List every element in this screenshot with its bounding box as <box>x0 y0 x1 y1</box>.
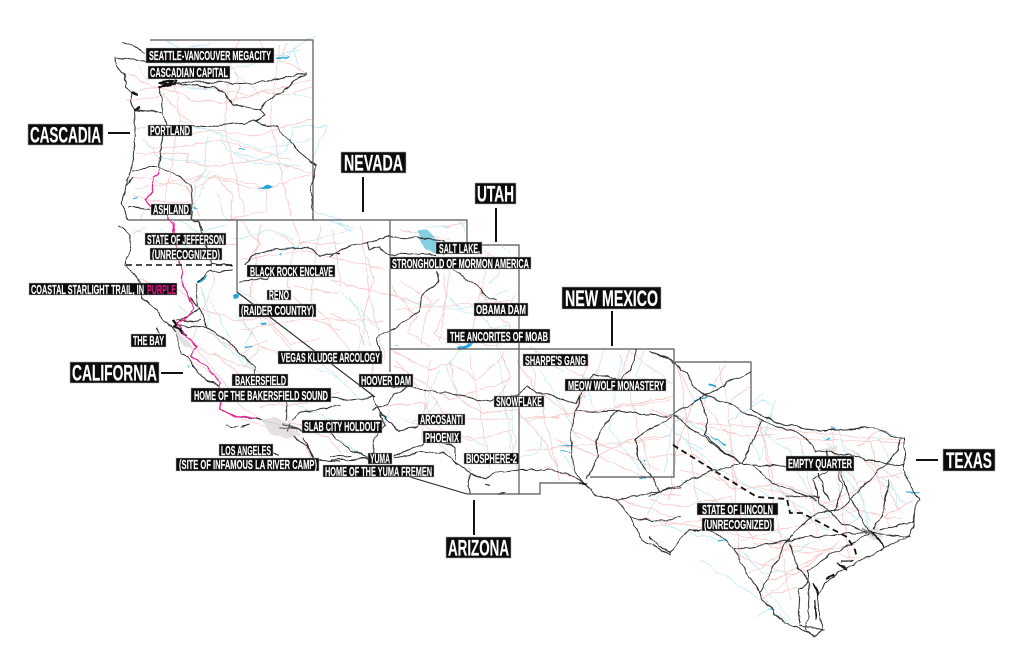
label: Cascadian Capital <box>148 66 230 80</box>
label: Hoover Dam <box>359 374 413 388</box>
label: Sharpe's Gang <box>523 354 588 368</box>
arrow: California leader <box>161 372 183 374</box>
label: The Bay <box>131 334 166 348</box>
callout: Texas heading: TEXAS <box>946 448 992 473</box>
callout: Arizona heading <box>446 536 511 560</box>
map: Arizona and New Mexico <box>330 341 680 555</box>
callout: Utah heading: UTAH <box>477 182 514 206</box>
label: Obama Dam: OBAMA DAM <box>476 303 526 317</box>
label: Bakersfield: BAKERSFIELD <box>235 374 286 388</box>
callout: Utah heading <box>475 182 516 206</box>
label: State of Jefferson: STATE OF JEFFERSON <box>147 233 224 247</box>
label: Salt Lake: SALT LAKE, <box>439 242 480 256</box>
label: Phoenix <box>423 431 461 445</box>
callout: California heading <box>70 360 159 386</box>
label: Ashland <box>151 203 191 217</box>
label: Phoenix: PHOENIX <box>425 431 459 445</box>
label: Site of Infamous LA River Camp <box>176 458 319 472</box>
label: Reno: RENO <box>269 288 289 302</box>
callout: Arizona heading: ARIZONA <box>448 536 509 560</box>
label: Black Rock Enclave <box>247 265 335 279</box>
state borders <box>128 40 751 494</box>
label: Portland <box>148 124 192 138</box>
callout: California heading: CALIFORNIA <box>72 360 157 386</box>
label: Stronghold of Mormon America <box>390 257 531 271</box>
map: Cascadia region (Washington and Oregon) <box>115 37 340 234</box>
label: The Bay: THE BAY <box>133 334 164 348</box>
dashed line: State of Jefferson border <box>126 264 234 266</box>
label: The Ancorites of Moab <box>447 329 550 344</box>
label: Biosphere-2: BIOSPHERE-2 <box>466 452 517 466</box>
label: Seattle-Vancouver Megacity: SEATTLE-VANCOUVER MEGACITY <box>149 49 271 63</box>
callout: Cascadia heading <box>28 122 103 148</box>
label: Ashland: ASHLAND <box>153 203 189 217</box>
callout: Nevada heading <box>341 150 406 176</box>
label: Yuma <box>368 452 392 466</box>
map: California and western Nevada <box>120 220 340 462</box>
callout: Cascadia heading: CASCADIA <box>30 122 101 148</box>
map: Texas <box>650 350 919 635</box>
label: Snowflake <box>494 395 544 409</box>
label: State of Jefferson <box>145 233 226 247</box>
map: base of roads, rivers and coastlines <box>115 37 919 635</box>
label: Snowflake: SNOWFLAKE <box>496 395 542 409</box>
label: State of Lincoln <box>697 503 778 517</box>
arrow: Nevada leader <box>362 177 364 212</box>
label: Black Rock Enclave: BLACK ROCK ENCLAVE <box>250 265 333 279</box>
map: minor roads network <box>135 45 900 600</box>
label: Unrecognized (Jefferson): (UNRECOGNIZED) <box>152 248 220 262</box>
label: Cascadian Capital: CASCADIAN CAPITAL <box>150 66 228 80</box>
arrow: Texas leader <box>916 459 938 461</box>
label: Vegas Kludge Arcology <box>278 351 382 365</box>
label: Home of the Bakersfield Sound <box>191 388 331 403</box>
callout: Nevada heading: NEVADA <box>344 150 403 176</box>
label: Slab City Holdout: SLAB CITY HOLDOUT <box>304 420 380 434</box>
label: Bakersfield <box>232 374 288 388</box>
label: Arcosanti <box>418 413 465 427</box>
label: Empty Quarter: EMPTY QUARTER <box>788 457 852 471</box>
arrow: New Mexico leader <box>611 311 613 346</box>
label: Home of the Bakersfield Sound: HOME OF THE BAKERSFIELD SOUND <box>194 389 328 403</box>
label: Portland: PORTLAND <box>150 124 190 138</box>
label: Reno <box>267 288 291 302</box>
label: State of Lincoln: STATE OF LINCOLN <box>702 503 773 517</box>
arrow: Arizona leader <box>473 500 475 535</box>
label: Seattle-Vancouver Megacity <box>146 48 274 63</box>
label: Unrecognized (Jefferson) <box>150 248 222 262</box>
label: Arcosanti: ARCOSANTI <box>420 413 463 427</box>
label: Slab City Holdout <box>302 420 382 434</box>
label: Unrecognized (Lincoln): (UNRECOGNIZED) <box>704 518 772 532</box>
label: Sharpe's Gang: SHARPE'S GANG <box>525 354 586 368</box>
label: Los Angeles: LOS ANGELES <box>221 444 271 458</box>
label: Salt Lake <box>436 242 482 256</box>
callout: New Mexico heading <box>562 286 661 311</box>
callout: New Mexico heading: NEW MEXICO <box>565 286 658 311</box>
label: Stronghold of Mormon America: STRONGHOLD OF MORMON AMERICA <box>392 257 529 271</box>
label: Yuma: YUMA <box>370 452 390 466</box>
arrow: Cascadia leader <box>108 132 130 134</box>
label: Unrecognized (Lincoln) <box>702 518 774 532</box>
label: Home of the Yuma Fremen <box>323 465 434 479</box>
dashed line: State of Lincoln border <box>673 445 857 558</box>
label: Los Angeles <box>219 444 273 458</box>
label: Meow Wolf Monastery <box>565 379 666 393</box>
map: rivers network <box>150 50 900 620</box>
label: The Ancorites of Moab: THE ANCORITES OF MOAB <box>450 330 548 344</box>
callout: Texas heading <box>943 448 995 473</box>
map: Utah and eastern Nevada <box>330 220 517 357</box>
label: Coastal Starlight Trail, in purple: PURPLE <box>147 283 176 297</box>
label: Obama Dam <box>474 303 528 317</box>
label: Hoover Dam: HOOVER DAM <box>361 374 411 388</box>
label: Meow Wolf Monastery: MEOW WOLF MONASTERY <box>568 379 664 393</box>
label: Home of the Yuma Fremen: HOME OF THE YUMA FREMEN <box>325 465 432 479</box>
label: Empty Quarter <box>786 456 854 471</box>
label: Coastal Starlight Trail, in purple: COASTAL STARLIGHT TRAIL, IN <box>31 283 144 297</box>
label: Vegas Kludge Arcology: VEGAS KLUDGE ARCOLOGY <box>281 351 380 365</box>
label: Site of Infamous LA River Camp: (SITE OF INFAMOUS LA RIVER CAMP) <box>179 458 317 472</box>
label: Biosphere-2 <box>464 452 519 466</box>
arrow: Utah leader <box>495 208 497 242</box>
label: Raider Country: (RAIDER COUNTRY) <box>241 304 314 318</box>
label: Raider Country <box>239 304 316 318</box>
